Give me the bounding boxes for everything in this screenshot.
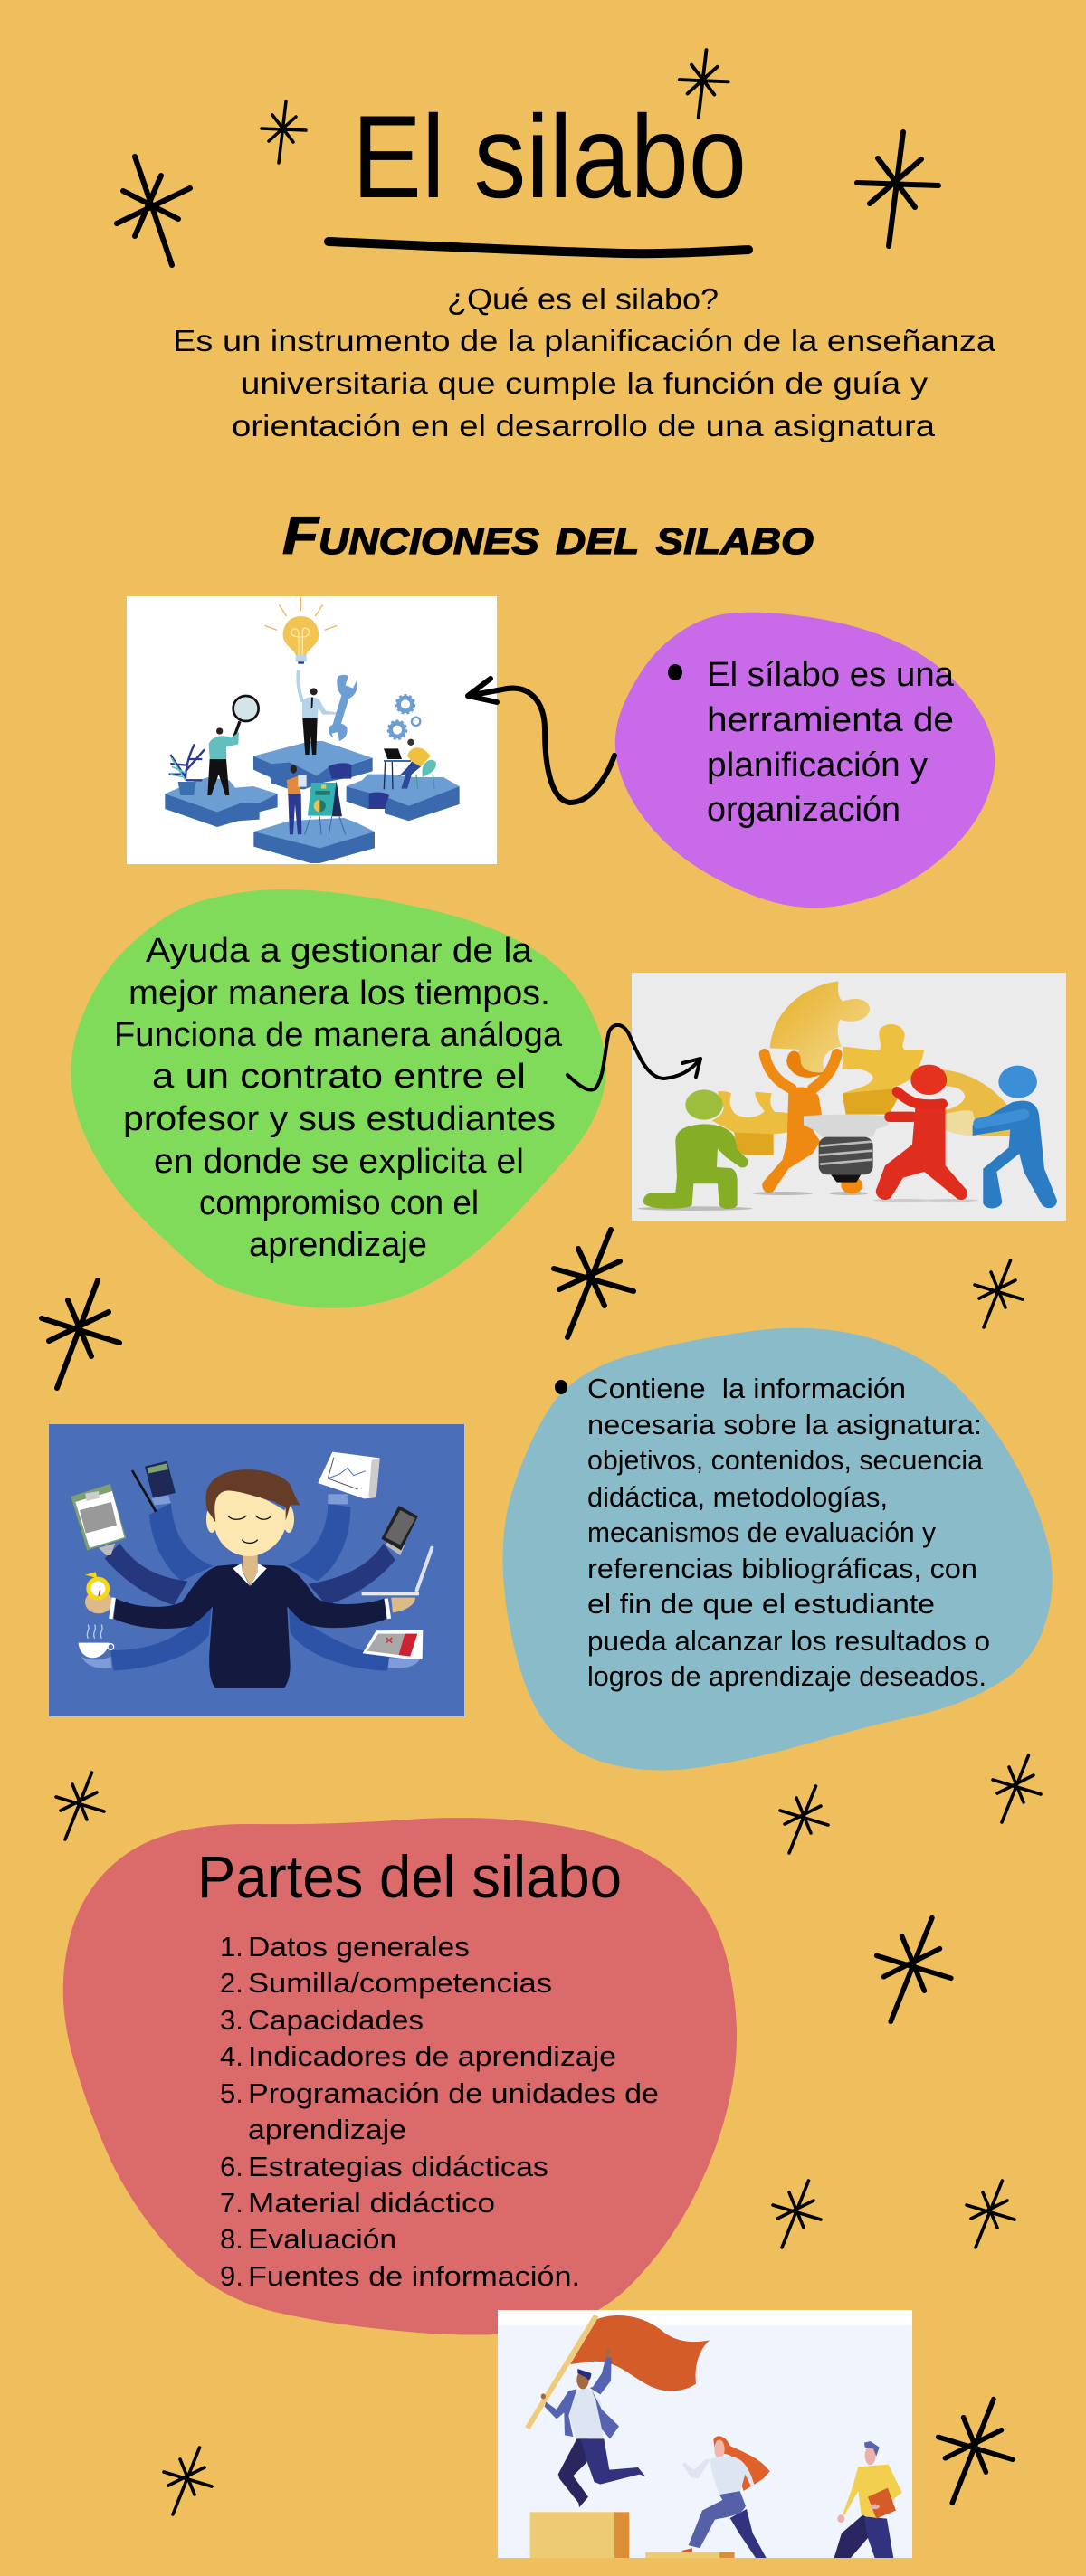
- list: partes: 5.: [220, 2077, 243, 2109]
- list: partes: 3.: [220, 2004, 243, 2036]
- list: partes: Datos generales: [248, 1931, 470, 1963]
- blue text: el fin de que el estudiante: [587, 1588, 935, 1620]
- blue blob: [503, 1328, 1053, 1771]
- star large right: [877, 1918, 951, 2021]
- star mid right: [993, 1755, 1041, 1822]
- purple text: [707, 656, 955, 829]
- star low right: [967, 2181, 1015, 2248]
- red blob: [63, 1818, 737, 2335]
- star bottom left: [164, 2448, 212, 2514]
- intro text block: Es un instrumento de la planificación de la enseñanza: [173, 324, 996, 357]
- title underline: [329, 242, 748, 253]
- list: partes: 8.: [220, 2223, 243, 2255]
- list: partes: Estrategias didácticas: [248, 2151, 548, 2182]
- green text: Ayuda a gestionar de la: [146, 932, 533, 970]
- star mid center: [780, 1786, 828, 1853]
- list: partes: 7.: [220, 2187, 243, 2219]
- arrow to puzzle image: [468, 679, 614, 803]
- star mid left: [56, 1773, 104, 1839]
- green text: en donde se explicita el: [154, 1143, 524, 1181]
- list: partes: 4.: [220, 2040, 243, 2072]
- purple text: herramienta de: [707, 701, 954, 739]
- intro text block: [173, 282, 996, 442]
- list: partes: Programación de unidades de: [248, 2077, 659, 2109]
- purple blob: [615, 613, 995, 908]
- blue text: Contiene la información: [587, 1373, 906, 1404]
- intro text block: universitaria que cumple la función de guía y: [241, 366, 929, 400]
- blue text: objetivos, contenidos, secuencia: [587, 1444, 984, 1476]
- green text: mejor manera los tiempos.: [129, 974, 550, 1012]
- star top right: [857, 132, 938, 246]
- green blob: [71, 889, 606, 1308]
- list: partes: 2.: [220, 1967, 243, 1999]
- star bottom right: [938, 2400, 1013, 2503]
- heading: funciones del silabo: Funciones del silabo: [282, 507, 814, 566]
- star near title top: [680, 50, 729, 118]
- arrow to bulb image: [567, 1025, 700, 1090]
- star top left: [117, 157, 190, 265]
- image: multitasking man: [49, 1424, 464, 1716]
- green text: Funciona de manera análoga: [114, 1016, 563, 1054]
- star center: [554, 1230, 634, 1337]
- purple text: El sílabo es una: [707, 656, 955, 694]
- image: team with flag: [498, 2310, 912, 2558]
- list: partes: 1.: [220, 1931, 243, 1963]
- list: partes: 6.: [220, 2151, 243, 2182]
- blue text: mecanismos de evaluación y: [587, 1516, 936, 1548]
- star low center: [773, 2181, 821, 2248]
- green text: a un contrato entre el: [152, 1058, 526, 1096]
- green text: compromiso con el: [199, 1184, 479, 1222]
- blue text: logros de aprendizaje deseados.: [587, 1660, 986, 1692]
- image: puzzle team: [127, 596, 497, 864]
- image: figures assembling a bulb: [632, 973, 1066, 1221]
- list: partes: [220, 1931, 659, 2292]
- purple text: organización: [707, 791, 900, 829]
- list: partes: Material didáctico: [248, 2187, 495, 2219]
- intro text block: ¿Qué es el silabo?: [447, 282, 719, 316]
- list: partes: 9.: [220, 2260, 243, 2292]
- bullet: purple: [668, 664, 682, 680]
- star right: [975, 1260, 1023, 1327]
- title: El silabo: [352, 90, 747, 223]
- intro text block: orientación en el desarrollo de una asignatura: [232, 409, 936, 442]
- blue text: didáctica, metodologías,: [587, 1481, 888, 1513]
- list: partes: Sumilla/competencias: [248, 1967, 552, 1999]
- blue text: referencias bibliográficas, con: [587, 1553, 977, 1584]
- blue text: [587, 1373, 990, 1692]
- list: partes: Indicadores de aprendizaje: [248, 2040, 616, 2072]
- green text: profesor y sus estudiantes: [123, 1100, 556, 1138]
- star near title left: [262, 101, 306, 163]
- bullet: blue: [555, 1380, 567, 1394]
- blue text: pueda alcanzar los resultados o: [587, 1625, 990, 1657]
- list: partes: aprendizaje: [248, 2114, 406, 2145]
- blue text: necesaria sobre la asignatura:: [587, 1409, 982, 1440]
- purple text: planificación y: [707, 746, 928, 784]
- list: partes: Capacidades: [248, 2004, 424, 2036]
- heading: partes del silabo: Partes del silabo: [197, 1843, 622, 1910]
- green text: [114, 932, 563, 1264]
- list: partes: Evaluación: [248, 2223, 396, 2255]
- list: partes: Fuentes de información.: [248, 2260, 580, 2292]
- green text: aprendizaje: [249, 1226, 427, 1264]
- star left: [42, 1280, 119, 1388]
